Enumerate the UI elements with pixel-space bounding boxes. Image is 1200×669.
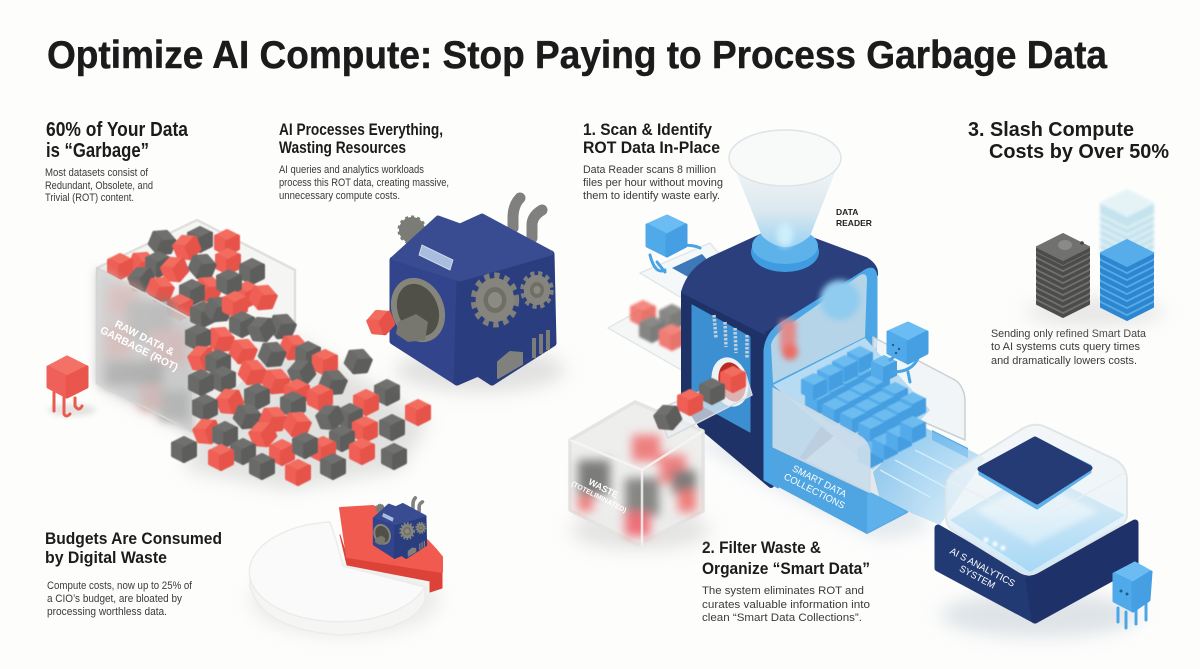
frosted window bbox=[771, 274, 867, 383]
cubes on tray bbox=[632, 302, 683, 349]
heading: step 3: Costs by Over 50% bbox=[989, 141, 1169, 163]
smart data cube grid bbox=[802, 347, 925, 467]
chute cubes bbox=[653, 368, 744, 432]
body: step 1: them to identify waste early. bbox=[583, 190, 720, 202]
port bbox=[706, 353, 754, 411]
mini machine bbox=[370, 498, 426, 558]
bin rim bbox=[570, 431, 703, 545]
heading: AI processes: Wasting Resources bbox=[279, 138, 406, 157]
heading: budgets: Budgets Are Consumed bbox=[45, 529, 222, 548]
illustration: glass container spilling garbage cubes bbox=[97, 220, 430, 490]
text block: 60% of your data bbox=[45, 119, 189, 204]
funnel bbox=[729, 130, 841, 272]
red wedge top bbox=[340, 506, 442, 572]
spilled cubes bbox=[173, 293, 429, 484]
illustration: data reader machine bbox=[608, 130, 985, 540]
text block: slash compute costs bbox=[968, 119, 1169, 367]
data beam bbox=[873, 425, 985, 525]
body: AI processes: process this ROT data, creating massive, bbox=[279, 177, 449, 189]
display bbox=[419, 245, 453, 270]
illustration: AI processor machine bbox=[366, 198, 565, 392]
blue ghost stack bbox=[1101, 190, 1153, 268]
container back edges bbox=[97, 220, 295, 432]
window frame bbox=[764, 268, 877, 488]
heading: step 1: ROT Data In-Place bbox=[583, 138, 720, 157]
machine body left bbox=[393, 260, 460, 382]
cubes at top of container bbox=[109, 228, 278, 319]
text block: budgets consumed bbox=[45, 529, 222, 618]
blue solid stack bbox=[1101, 240, 1153, 320]
machine tower right back bbox=[765, 268, 877, 487]
data reader label: READER bbox=[836, 218, 872, 228]
body: 60 percent: Trivial (ROT) content. bbox=[45, 192, 134, 204]
system label: AI S ANALYTICS bbox=[948, 546, 1017, 590]
base left bbox=[938, 528, 1035, 620]
pie shadow bbox=[250, 564, 440, 636]
illustration: waste bin and chute bbox=[570, 368, 752, 550]
body: step 1: Data Reader scans 8 million bbox=[583, 164, 716, 176]
heading: step 2: Organize “Smart Data” bbox=[702, 559, 870, 578]
system label: SYSTEM bbox=[957, 563, 997, 592]
blue cube character on tray bbox=[647, 216, 712, 278]
data reader label: DATA bbox=[836, 207, 858, 217]
tray inner bbox=[773, 338, 930, 470]
body: 60 percent: Most datasets consist of bbox=[45, 167, 149, 179]
glass dome bbox=[946, 425, 1127, 574]
vents bbox=[534, 330, 548, 358]
body: step 2: clean “Smart Data Collections”. bbox=[702, 612, 862, 624]
intake port bbox=[382, 270, 454, 350]
machine tower left face bbox=[684, 292, 771, 485]
door bbox=[498, 352, 522, 378]
icon: red cube character bbox=[48, 357, 96, 416]
tray label: SMART DATA bbox=[790, 463, 849, 500]
container frosted front face bbox=[97, 268, 193, 432]
body: budgets: processing worthless data. bbox=[47, 606, 167, 618]
machine tower top bbox=[682, 226, 877, 334]
body: step 3: to AI systems cuts query times bbox=[991, 341, 1140, 353]
body: AI processes: unnecessary compute costs. bbox=[279, 190, 400, 202]
small gear bbox=[523, 274, 551, 306]
heading: AI processes: AI Processes Everything, bbox=[279, 120, 443, 139]
input tray lower bbox=[608, 310, 685, 372]
title: Optimize AI Compute: Stop Paying to Process Garbage Data bbox=[47, 34, 1107, 77]
heading: step 1: 1. Scan & Identify bbox=[583, 120, 712, 139]
exhaust pipes bbox=[513, 198, 542, 238]
heading: budgets: by Digital Waste bbox=[45, 548, 167, 567]
red wedge side bbox=[340, 535, 442, 592]
heading: step 3: 3. Slash Compute bbox=[968, 119, 1134, 141]
bin body bbox=[570, 402, 703, 545]
blurred waste bbox=[578, 435, 696, 536]
gray stack bbox=[1037, 234, 1089, 317]
scan panel bbox=[692, 305, 750, 432]
blurred content in window bbox=[780, 280, 860, 360]
heading: step 2: 2. Filter Waste & bbox=[702, 538, 821, 557]
tray base bbox=[772, 445, 907, 533]
body: 60 percent: Redundant, Obsolete, and bbox=[45, 180, 153, 192]
bin shadow bbox=[570, 510, 710, 550]
body: budgets: Compute costs, now up to 25% of bbox=[47, 580, 193, 592]
navy chip bbox=[980, 439, 1090, 508]
glowing core bbox=[950, 470, 1125, 572]
tray label: COLLECTIONS bbox=[782, 471, 847, 512]
floor shadow bbox=[690, 440, 930, 540]
heading: 60 percent: 60% of Your Data bbox=[46, 119, 189, 141]
base right bbox=[1029, 523, 1135, 620]
system shadow bbox=[940, 593, 1140, 637]
body: step 1: files per hour without moving bbox=[583, 177, 723, 189]
text block: filter waste bbox=[702, 538, 870, 624]
body: step 3: Sending only refined Smart Data bbox=[991, 328, 1147, 340]
status lights bbox=[984, 538, 1006, 550]
chute bbox=[657, 372, 752, 438]
rear gear bbox=[399, 217, 425, 243]
bin label: (TOTELIMINATED) bbox=[570, 481, 627, 515]
stack shadow bbox=[1025, 298, 1165, 326]
red cube entering machine bbox=[366, 308, 395, 337]
floor shadow bbox=[100, 340, 430, 490]
machine body top bbox=[394, 216, 551, 279]
frosted front panel bbox=[773, 388, 870, 493]
body: step 3: and dramatically lowers costs. bbox=[991, 355, 1137, 367]
input tray upper bbox=[640, 243, 720, 297]
pie glass top bbox=[249, 522, 425, 622]
container label: RAW DATA & bbox=[113, 318, 176, 359]
right glass wall bbox=[873, 337, 965, 440]
heading: 60 percent: is “Garbage” bbox=[46, 140, 149, 162]
body: budgets: a CIO’s budget, are bloated by bbox=[47, 593, 182, 605]
blurred cubes behind frosted glass bbox=[97, 268, 193, 432]
panel readout marks bbox=[714, 315, 747, 358]
bin label: WASTE bbox=[587, 477, 620, 500]
illustration: AI and analytics system bbox=[938, 425, 1151, 637]
body: step 2: curates valuable information into bbox=[702, 599, 870, 611]
machine body right bbox=[457, 254, 553, 382]
blue cube character bbox=[1114, 563, 1151, 628]
rail bbox=[932, 430, 968, 458]
illustration: budget pie chart bbox=[249, 498, 442, 636]
text block: scan and identify bbox=[583, 120, 723, 202]
container label: GARBAGE (ROT) bbox=[98, 324, 180, 374]
illustration: compute cost stacks bbox=[1025, 190, 1165, 326]
body: AI processes: AI queries and analytics workloads bbox=[279, 164, 424, 176]
pie glass side bbox=[250, 572, 425, 635]
machine shadow bbox=[395, 348, 565, 392]
blue cube character at tray bbox=[872, 323, 927, 382]
big gear bbox=[474, 276, 516, 324]
text block: AI processes everything bbox=[279, 120, 449, 202]
body: step 2: The system eliminates ROT and bbox=[702, 585, 864, 597]
